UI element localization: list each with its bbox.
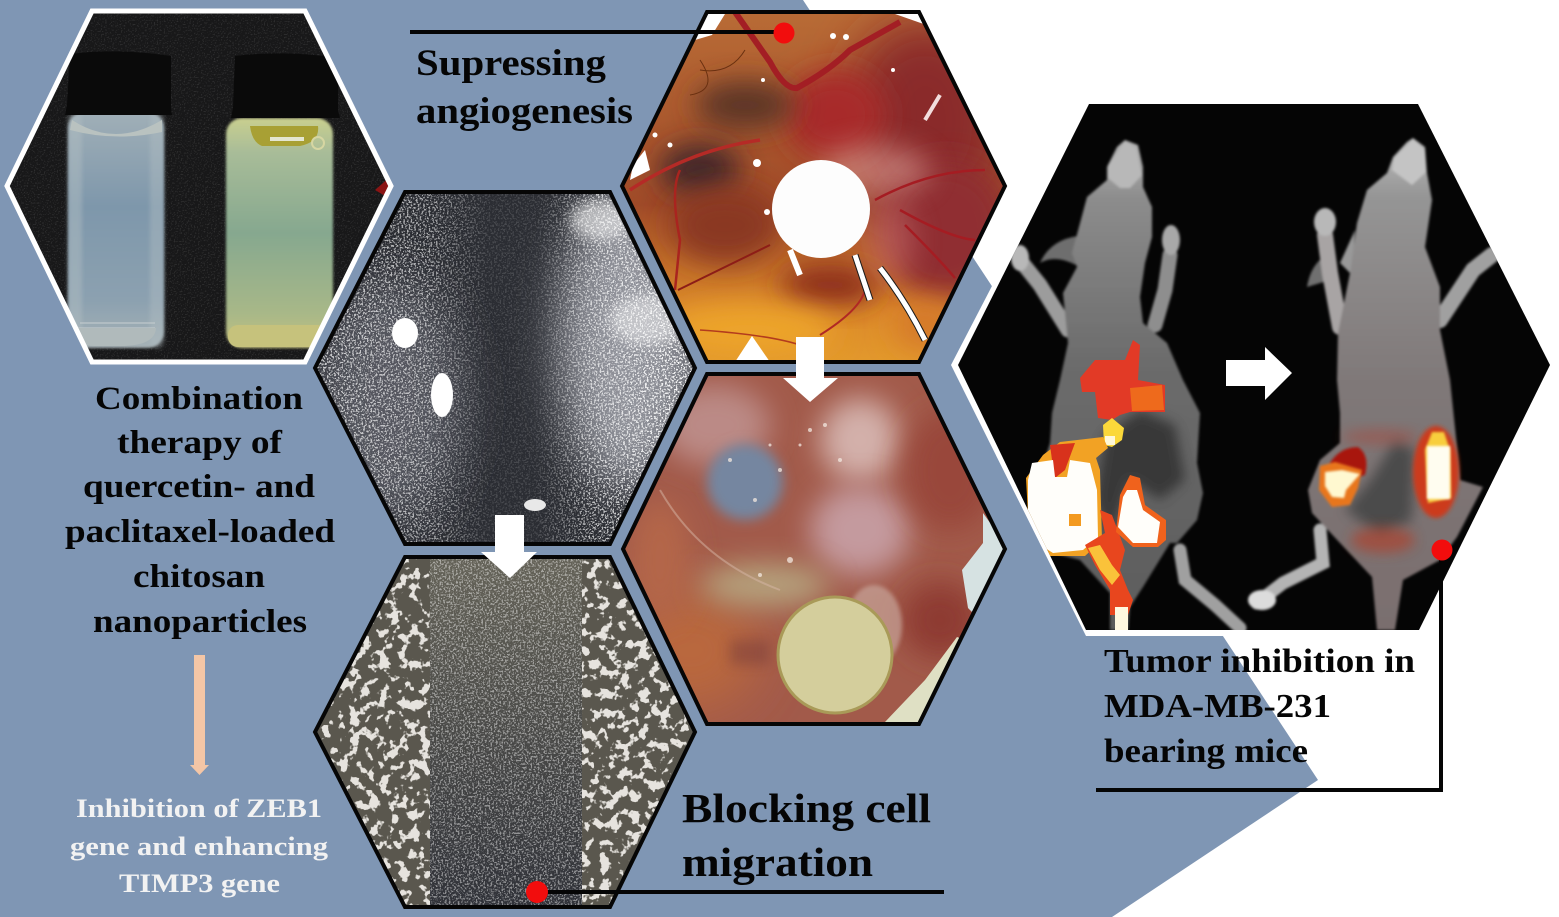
text: blocking cell migration label: migration <box>682 839 873 885</box>
arrow: top white down arrow <box>783 337 838 402</box>
text: combination therapy description: chitosan <box>133 559 265 595</box>
text: supressing angiogenesis label: Supressing <box>416 43 607 84</box>
text: combination therapy description: Combination <box>95 381 303 417</box>
text: gene effects in white: gene and enhancing <box>70 832 328 861</box>
left mouse fluorescence <box>1026 340 1166 630</box>
text: tumor inhibition label <box>1104 643 1415 770</box>
arrow: lower white down arrow <box>481 515 537 578</box>
text: combination therapy description: paclitaxel-loaded <box>65 514 335 550</box>
hexagon photo: wound after treatment, cell scratch assay <box>310 552 700 912</box>
text: tumor inhibition label: Tumor inhibition in <box>1104 643 1415 680</box>
hexagon photo: wound at start, cell scratch assay <box>310 188 700 548</box>
text: tumor inhibition label: MDA-MB-231 <box>1104 688 1331 725</box>
text: combination therapy description: quercetin- and <box>83 469 315 505</box>
hexagon photo: nanoparticle vials <box>0 0 400 370</box>
callout: tumor inhibition leader line and dot <box>1096 540 1452 790</box>
callout: angiogenesis leader line and dot <box>410 22 794 44</box>
text: supressing angiogenesis label: angiogenesis <box>416 91 633 132</box>
text: blocking cell migration label: Blocking cell <box>682 785 931 831</box>
left mouse body <box>1011 140 1240 630</box>
right mouse fluorescence <box>1319 426 1459 553</box>
arrow: white right arrow between mice <box>1226 347 1292 400</box>
text: gene effects in white: TIMP3 gene <box>119 869 280 898</box>
text: combination therapy description: nanoparticles <box>93 604 307 640</box>
text: combination therapy description: therapy of <box>117 425 283 461</box>
hexagon photo: chick membrane vessels, control <box>615 8 1010 366</box>
text: gene effects in white <box>70 794 328 898</box>
text: tumor inhibition label: bearing mice <box>1104 733 1308 770</box>
text: blocking cell migration label <box>682 785 931 885</box>
arrow: peach down arrow <box>190 655 209 775</box>
hexagon photo: chick membrane, treated <box>615 368 1010 728</box>
text: gene effects in white: Inhibition of ZEB1 <box>76 794 322 823</box>
text: supressing angiogenesis label <box>416 43 633 132</box>
right mouse body <box>1248 138 1492 630</box>
text: combination therapy description <box>65 381 335 640</box>
callout: cell migration leader line and dot <box>526 881 944 903</box>
hexagon photo: tumor-bearing mice imaging <box>950 99 1559 636</box>
